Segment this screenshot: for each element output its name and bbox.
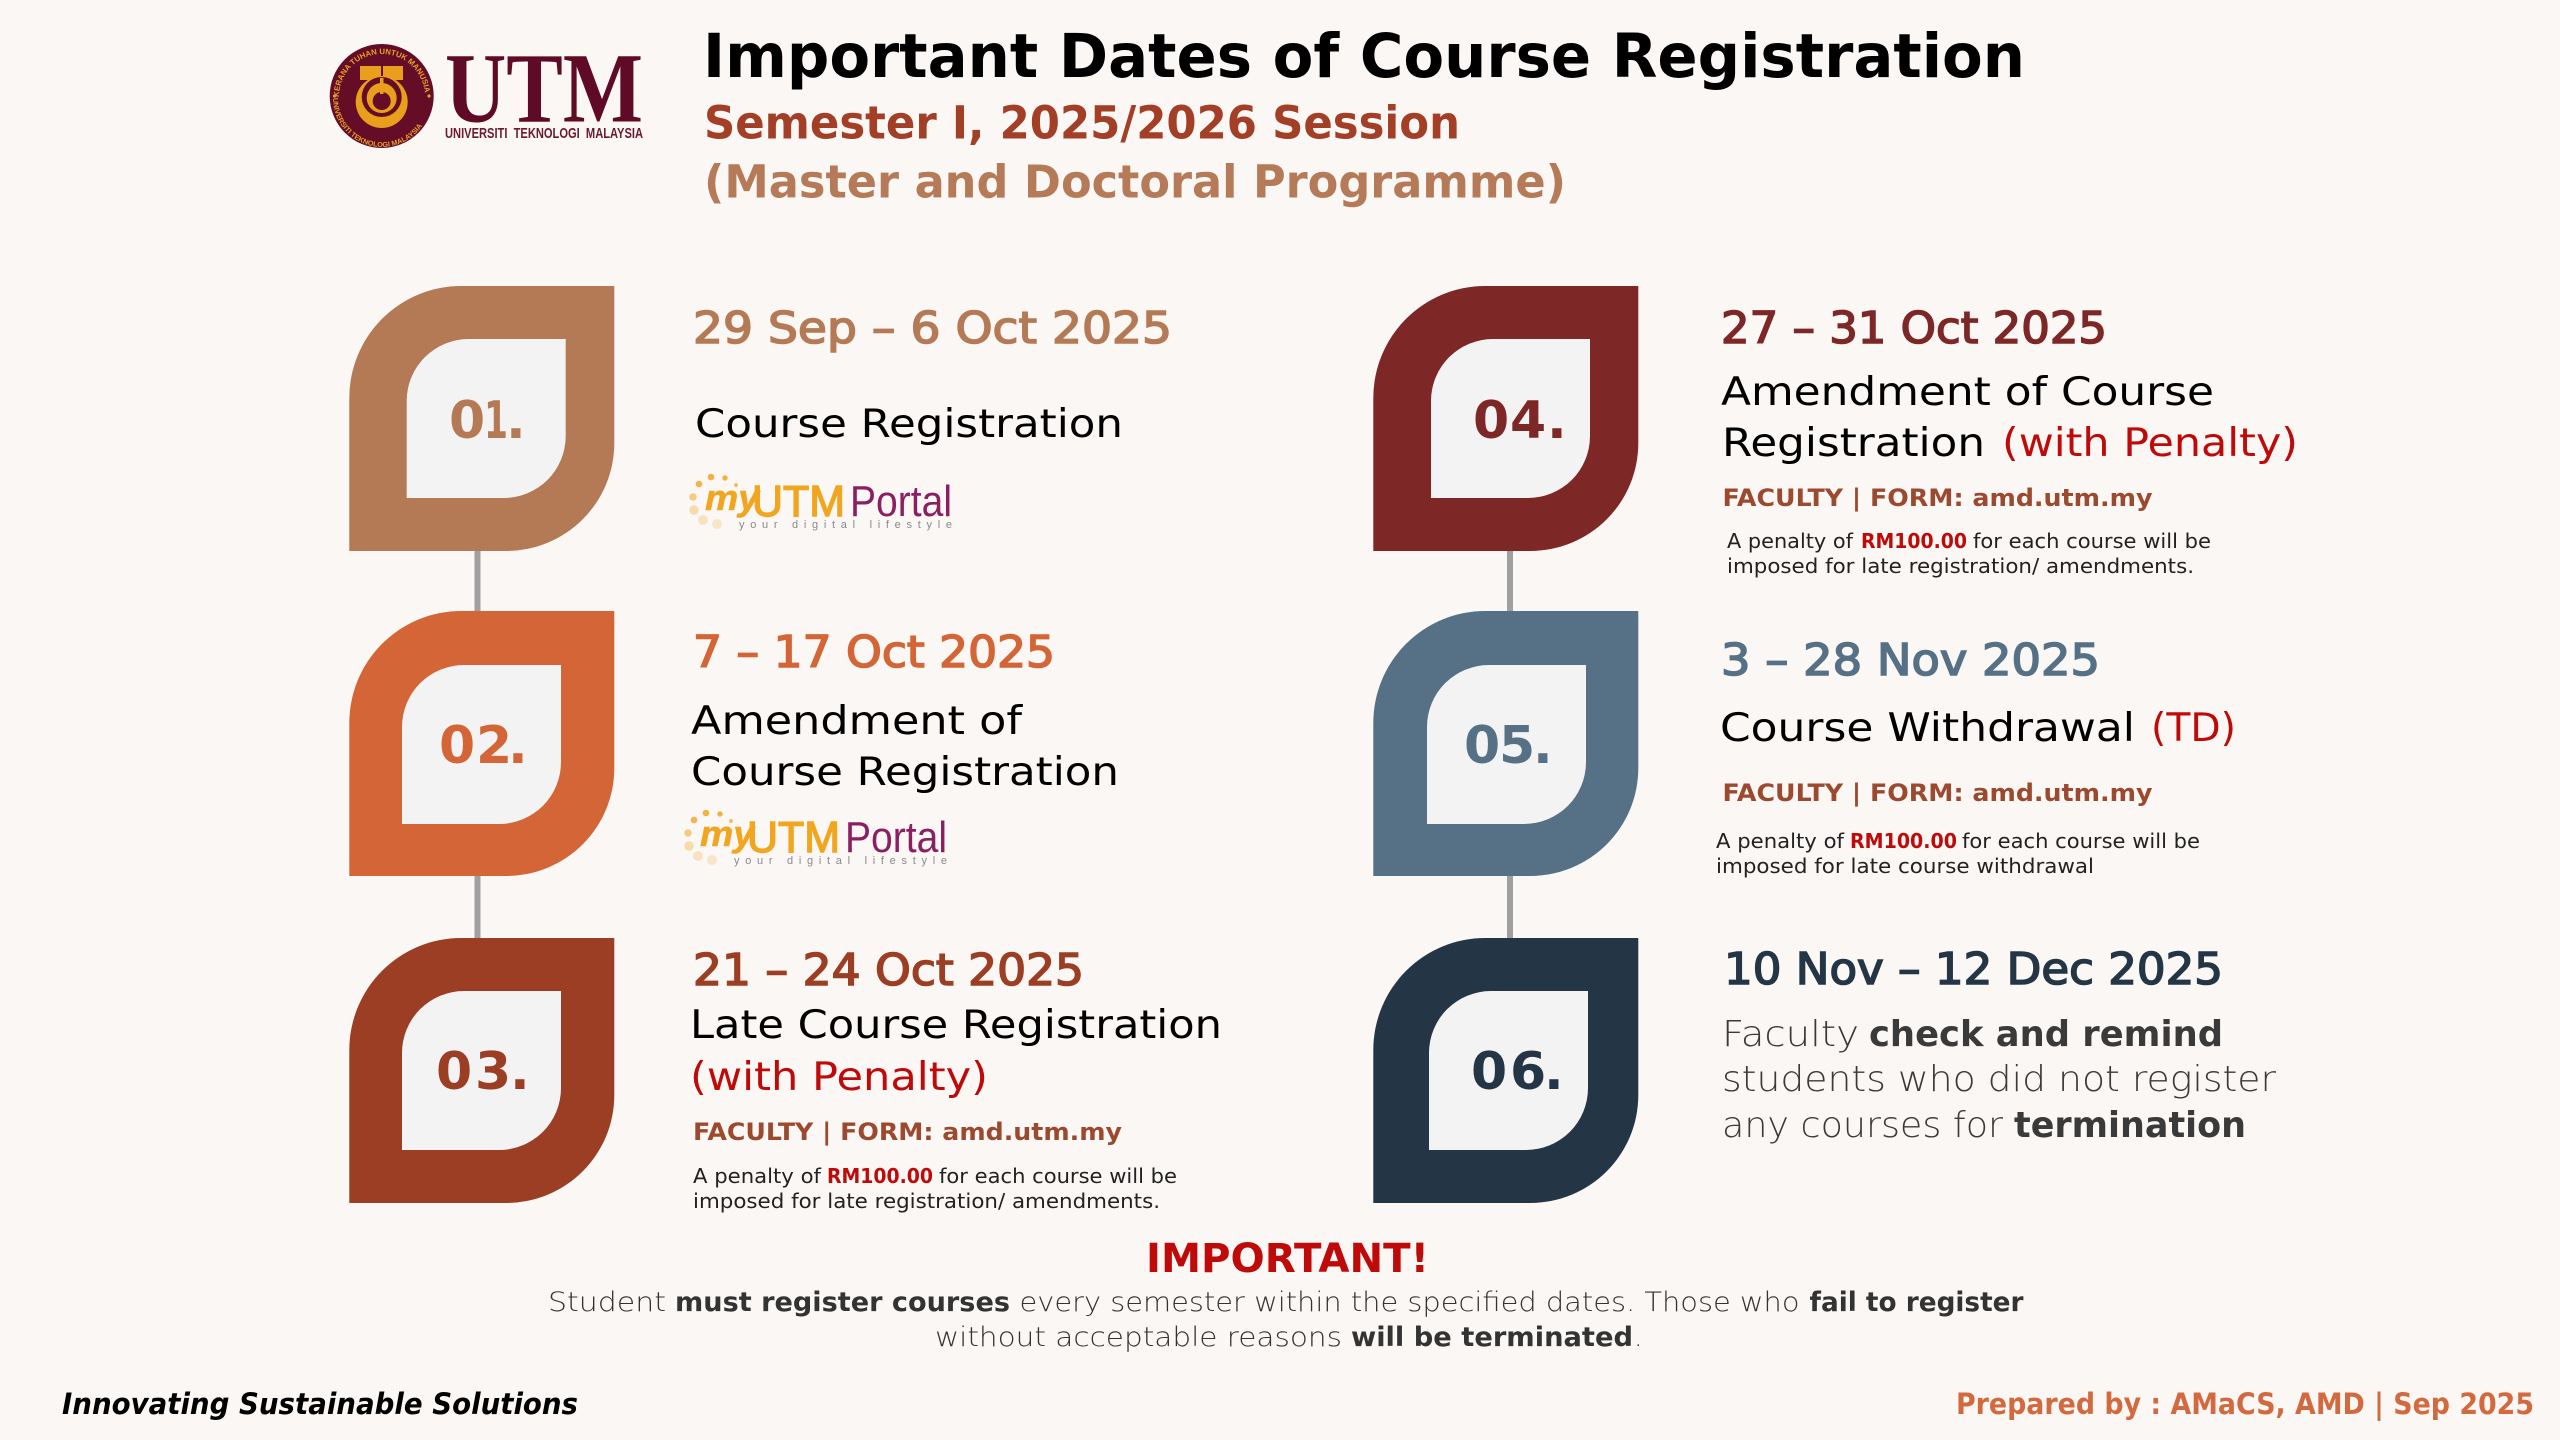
description: termination (2014, 1105, 2246, 1146)
callout text (548, 1287, 2024, 1353)
icon: leaf badge 03: 03. (436, 1042, 530, 1102)
logo: myUTM Portal (684, 810, 947, 867)
icon: leaf badge 05 (1373, 611, 1638, 876)
penalty note: for each course will be (939, 1164, 1177, 1188)
penalty note: for each course will be (1973, 529, 2211, 553)
icon: leaf badge 04: 04. (1473, 391, 1567, 451)
panel: step 05 (1373, 611, 2236, 878)
logo: myUTM Portal (689, 474, 952, 531)
callout text: . (1634, 1322, 1643, 1353)
logo: myUTM Portal: Portal (845, 813, 947, 862)
logo: myUTM Portal: UTM (747, 813, 840, 862)
callout text: will be terminated (1351, 1322, 1633, 1353)
icon: leaf badge 01 (349, 286, 614, 551)
wordmark: university name: UNIVERSITI TEKNOLOGI MALAYSIA (445, 125, 643, 142)
penalty note: imposed for late course withdrawal (1716, 854, 2094, 878)
logo: myUTM Portal: your digital lifestyle (739, 519, 952, 531)
panel: step 01 (349, 286, 1172, 551)
icon: leaf badge 01: . (506, 391, 526, 451)
activity: (with Penalty) (2002, 421, 2298, 466)
penalty note: imposed for late registration/ amendments. (1727, 554, 2194, 578)
callout text: Student (548, 1287, 666, 1318)
form link: FACULTY | FORM: amd.utm.my (1722, 779, 2153, 807)
connector: step 02 to 03 (474, 876, 480, 938)
connector: step 05 to 06 (1507, 876, 1513, 938)
penalty note: A penalty of (1716, 829, 1845, 853)
activity: Course Withdrawal (1720, 706, 2135, 751)
logo: myUTM Portal: your digital lifestyle (734, 855, 947, 867)
logo: myUTM Portal: UTM (752, 477, 845, 526)
callout text: without acceptable reasons (935, 1322, 1342, 1353)
activity: Late Course Registration (690, 1003, 1222, 1048)
date: 3 – 28 Nov 2025 (1721, 635, 2100, 686)
logo: myUTM Portal: Portal (850, 477, 952, 526)
icon: leaf badge 01: 0 (449, 391, 485, 451)
panel: step 06 (1373, 938, 2276, 1203)
icon: leaf badge 04 (1373, 286, 1638, 551)
activity: Course Registration (695, 402, 1123, 447)
description: any courses for (1722, 1105, 2003, 1146)
description: students who did not register (1722, 1059, 2276, 1100)
activity (690, 1003, 1222, 1100)
form link: FACULTY | FORM: amd.utm.my (1722, 484, 2153, 512)
logo: UTM (330, 33, 643, 148)
activity (1721, 370, 2298, 466)
icon: UTM crest: UNIVERSITI TEKNOLOGI MALAYSIA (333, 98, 422, 148)
icon: leaf badge 05: 05. (1464, 716, 1553, 776)
logo: myUTM Portal: my (705, 477, 761, 518)
icon: leaf badge 06 (1373, 938, 1638, 1203)
heading: title block (703, 21, 2025, 208)
callout text: every semester within the specified dates. Those who (1020, 1287, 1800, 1318)
activity: (with Penalty) (690, 1055, 988, 1100)
icon: leaf badge 02 (349, 611, 614, 876)
penalty note: for each course will be (1962, 829, 2200, 853)
penalty note: A penalty of (693, 1164, 822, 1188)
date: 7 – 17 Oct 2025 (693, 627, 1055, 678)
description: Faculty (1722, 1014, 1859, 1055)
form link: FACULTY | FORM: amd.utm.my (693, 1118, 1122, 1146)
icon: UTM crest (330, 44, 434, 148)
activity: (TD) (2151, 706, 2236, 751)
connector: step 04 to 05 (1507, 551, 1513, 611)
panel: step 03 (349, 938, 1222, 1213)
activity (691, 699, 1119, 795)
penalty note (1727, 529, 2211, 578)
description: check and remind (1869, 1014, 2223, 1055)
callout: important notice (548, 1236, 2024, 1353)
activity: Registration (1722, 421, 1985, 466)
description (1722, 1014, 2276, 1146)
panel: step 04 (1373, 286, 2298, 578)
callout text: must register courses (675, 1287, 1010, 1318)
icon: leaf badge 03 (349, 938, 614, 1203)
penalty note: imposed for late registration/ amendments. (693, 1189, 1160, 1213)
activity: Amendment of Course (1721, 370, 2214, 415)
penalty note (1716, 829, 2200, 878)
date: 27 – 31 Oct 2025 (1721, 303, 2107, 354)
penalty note: RM100.00 (1861, 529, 1967, 553)
logo: myUTM Portal: my (700, 813, 756, 854)
icon: leaf badge 06: 06. (1471, 1042, 1564, 1102)
date: 29 Sep – 6 Oct 2025 (693, 303, 1172, 354)
subtitle: programme: (Master and Doctoral Programme) (704, 156, 1566, 208)
callout text: fail to register (1810, 1287, 2024, 1318)
icon: UTM crest: KERANA TUHAN UNTUK MANUSIA (334, 48, 430, 97)
activity: Amendment of (691, 699, 1023, 744)
penalty note: A penalty of (1727, 529, 1854, 553)
callout heading: IMPORTANT! (1146, 1236, 1429, 1282)
penalty note: RM100.00 (827, 1164, 933, 1188)
wordmark: UTM: UTM (445, 33, 643, 144)
connector: step 01 to 02 (474, 551, 480, 611)
date: 21 – 24 Oct 2025 (693, 945, 1084, 996)
title: Important Dates of Course Registration (703, 21, 2025, 92)
penalty note (693, 1164, 1177, 1213)
icon: leaf badge 02: 02. (439, 716, 528, 776)
activity: Course Registration (691, 750, 1119, 795)
footer: tagline: Innovating Sustainable Solutions (62, 1387, 578, 1421)
panel: step 02 (349, 611, 1119, 876)
penalty note: RM100.00 (1850, 829, 1957, 853)
icon: leaf badge 01: 1 (484, 391, 508, 451)
date: 10 Nov – 12 Dec 2025 (1724, 944, 2223, 995)
subtitle: semester: Semester I, 2025/2026 Session (704, 96, 1460, 150)
